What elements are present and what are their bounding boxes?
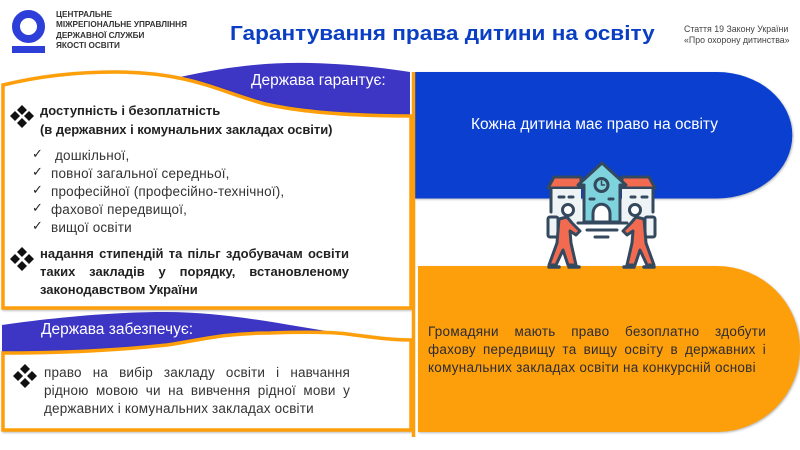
icon: bullet diamonds 2	[10, 247, 34, 271]
checklist: education levels: ✓	[32, 200, 43, 216]
text block: access and free of charge: (в державних і комунальних закладах освіти)	[40, 122, 332, 137]
vertical orange divider	[412, 72, 415, 437]
legal reference	[684, 24, 790, 45]
legal reference: Стаття 19 Закону України	[684, 24, 788, 34]
text block: right to choose: право на вибір закладу освіти і навчання	[44, 365, 350, 380]
checklist: education levels: фахової передвищої,	[51, 202, 187, 216]
panel: state guarantees header ribbon	[180, 63, 410, 116]
text block: scholarships: надання стипендій та пільг здобувачам освіти	[40, 246, 349, 260]
heading: state guarantees: Держава гарантує:	[251, 72, 386, 89]
text block: access and free of charge: доступність і безоплатність	[40, 103, 220, 118]
checklist: education levels: ✓	[32, 146, 43, 162]
panel: state provides box	[3, 332, 411, 430]
icon: bullet diamonds 3	[13, 364, 37, 388]
text block: access and free of charge	[40, 103, 332, 137]
agency name: ЦЕНТРАЛЬНЕ	[56, 10, 112, 19]
heading: state provides: Держава забезпечує:	[41, 321, 193, 338]
checklist: education levels: ✓	[32, 218, 43, 234]
icon: bullet diamonds 1	[10, 105, 34, 128]
legal reference: «Про охорону дитинства»	[684, 34, 790, 44]
text block: scholarships: законодавством України	[40, 282, 198, 296]
text block: citizens' rights: Громадяни мають право безоплатно здобути	[428, 324, 766, 338]
checklist: education levels: вищої освіти	[51, 220, 132, 234]
title: Гарантування права дитини на освіту	[230, 22, 655, 44]
text: every child has the right to education: Кожна дитина має право на освіту	[471, 116, 718, 133]
text block: right to choose	[44, 365, 350, 416]
left figure	[548, 204, 580, 267]
panel: state guarantees box	[3, 72, 411, 308]
checklist: education levels: дошкільної,	[55, 148, 129, 162]
agency name: ЯКОСТІ ОСВІТИ	[56, 41, 120, 50]
text block: scholarships	[40, 246, 349, 296]
text block: scholarships: таких закладів у порядку, встановленому	[40, 264, 349, 278]
checklist: education levels: професійної (професійно-технічної),	[51, 184, 284, 198]
text block: citizens' rights: фахову передвищу та вищу освіту в державних і	[428, 342, 766, 356]
text block: citizens' rights	[428, 324, 766, 375]
panel: orange right panel	[418, 266, 800, 432]
checklist: education levels	[32, 146, 284, 235]
checklist: education levels: ✓	[32, 182, 43, 198]
right figure	[623, 204, 655, 267]
checklist: education levels: повної загальної середньої,	[51, 166, 230, 180]
text block: right to choose: державних і комунальних закладах освіти	[44, 401, 314, 416]
icon: agency logo	[12, 14, 45, 53]
agency name: МІЖРЕГІОНАЛЬНЕ УПРАВЛІННЯ	[56, 20, 187, 29]
agency name	[56, 10, 187, 50]
icon: school with two figures	[548, 163, 655, 267]
text block: citizens' rights: комунальних закладах освіти на конкурсній основі	[428, 360, 756, 375]
panel: state provides header ribbon	[2, 312, 345, 352]
agency name: ДЕРЖАВНОЇ СЛУЖБИ	[56, 31, 144, 40]
checklist: education levels: ✓	[32, 164, 43, 180]
panel: blue right panel	[414, 72, 792, 198]
text block: right to choose: рідною мовою чи на вивчення рідної мови у	[44, 383, 350, 398]
